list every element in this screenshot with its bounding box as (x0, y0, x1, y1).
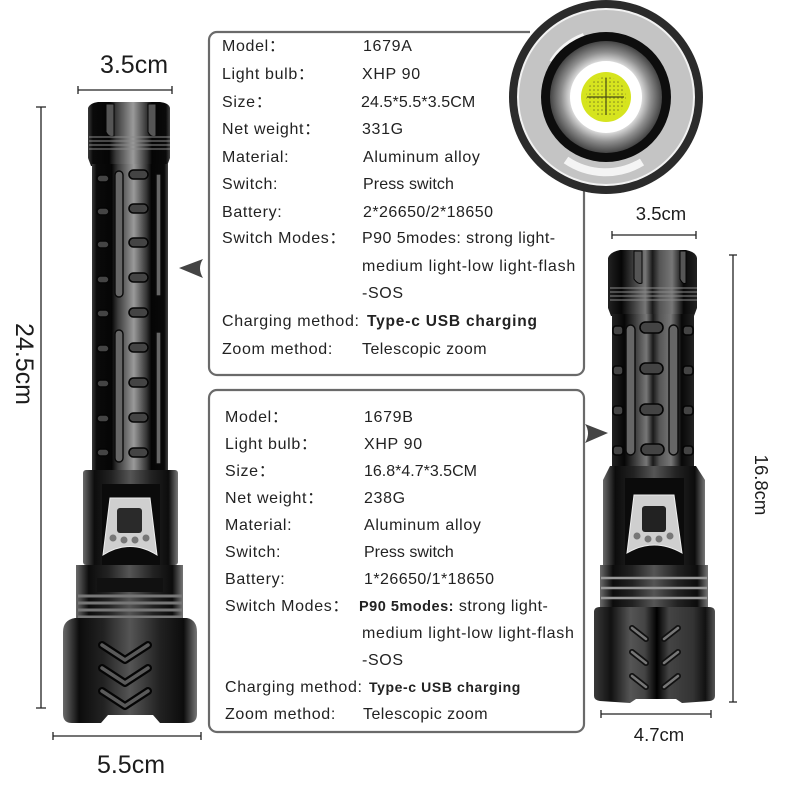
panel: model 1679B (209, 390, 584, 732)
specs 1679A: Battery: (222, 204, 282, 221)
specs 1679B: medium light-low light-flash (362, 625, 575, 642)
tail cap (608, 250, 697, 316)
specs 1679A: Zoom method: (222, 341, 333, 358)
body grooves (613, 322, 693, 455)
specs 1679B: Charging method: (225, 679, 363, 696)
specs 1679B: Zoom method: (225, 706, 336, 723)
dimension: small height 16.8cm (729, 255, 772, 702)
head (63, 618, 197, 723)
specs 1679A: XHP 90 (362, 66, 421, 83)
dimension: small bottom 4.7cm: 4.7cm (634, 724, 684, 745)
specs 1679B: Model： (225, 409, 288, 426)
switch housing (603, 466, 705, 565)
collar (600, 565, 708, 608)
specs 1679A: Size： (222, 94, 272, 111)
panel: model 1679A (209, 32, 584, 375)
specs 1679A: Switch Modes： (222, 230, 346, 247)
specs 1679B: Size： (225, 463, 275, 480)
specs 1679B: XHP 90 (364, 436, 423, 453)
specs 1679B: 1*26650/1*18650 (364, 571, 494, 588)
dimension: large bottom 5.5cm: 5.5cm (97, 751, 165, 779)
specs 1679B: 1679B (364, 409, 414, 426)
body tube (612, 314, 694, 466)
specs 1679A: Type-c USB charging (367, 313, 538, 330)
tail cap (88, 102, 170, 166)
specs 1679B: 238G (364, 490, 406, 507)
dimension: small width 3.5cm (612, 203, 696, 239)
specs 1679B: -SOS (362, 652, 404, 669)
specs 1679B: Switch Modes： (225, 598, 349, 615)
dimension: large height 24.5cm (10, 107, 46, 708)
specs 1679B: P90 5modes: strong light- (359, 598, 548, 615)
switch housing (83, 470, 178, 565)
specs 1679B: Battery: (225, 571, 285, 588)
specs 1679A: 2*26650/2*18650 (363, 204, 493, 221)
specs 1679B (225, 409, 575, 723)
specs 1679A: Charging method: (222, 313, 360, 330)
specs 1679A: Aluminum alloy (363, 149, 481, 166)
specs 1679A: -SOS (362, 285, 404, 302)
specs 1679A: Press switch (363, 176, 454, 193)
specs 1679A: Light bulb： (222, 66, 315, 83)
specs 1679A: Telescopic zoom (362, 341, 487, 358)
specs 1679A: Model： (222, 38, 285, 55)
specs 1679A: medium light-low light-flash (362, 258, 576, 275)
specs 1679B: Aluminum alloy (364, 517, 482, 534)
lens: front view of the flashlight (509, 0, 703, 194)
specs 1679B: Telescopic zoom (363, 706, 488, 723)
chevrons (102, 645, 148, 706)
specs 1679B: Type-c USB charging (369, 679, 521, 695)
dimension: large width 3.5cm (78, 51, 172, 94)
dimension: small height 16.8cm: 16.8cm (751, 455, 772, 515)
head (594, 607, 715, 703)
flashlight 1679A (large) (63, 102, 197, 723)
specs 1679A: Material: (222, 149, 289, 166)
display plate (627, 495, 682, 553)
specs 1679B: Light bulb： (225, 436, 318, 453)
display plate (103, 498, 157, 555)
dimension: small width 3.5cm: 3.5cm (636, 203, 686, 224)
specs 1679A: P90 5modes: strong light- (362, 230, 556, 247)
flashlight 1679B (small) (594, 250, 715, 703)
dimension: small bottom 4.7cm (601, 710, 711, 745)
specs 1679B: Material: (225, 517, 292, 534)
specs 1679B: 16.8*4.7*3.5CM (364, 463, 477, 480)
specs 1679B: Switch: (225, 544, 281, 561)
specs 1679B: Net weight： (225, 490, 324, 507)
dimension: large bottom 5.5cm (53, 732, 201, 779)
specs 1679A (222, 38, 576, 358)
specs 1679A: 331G (362, 121, 404, 138)
arrow: points to large flashlight (179, 259, 203, 278)
specs 1679A: 1679A (363, 38, 413, 55)
arrow: points to small flashlight (585, 424, 608, 443)
body grooves (97, 170, 161, 464)
dimension: large height 24.5cm: 24.5cm (10, 323, 38, 405)
specs 1679B: Press switch (364, 544, 454, 561)
chevrons (632, 628, 678, 687)
specs 1679A: Switch: (222, 176, 278, 193)
dimension: large width 3.5cm: 3.5cm (100, 51, 168, 79)
collar (76, 565, 183, 621)
specs 1679A: Net weight： (222, 121, 321, 138)
specs 1679A: 24.5*5.5*3.5CM (361, 94, 475, 111)
body tube (92, 164, 168, 471)
